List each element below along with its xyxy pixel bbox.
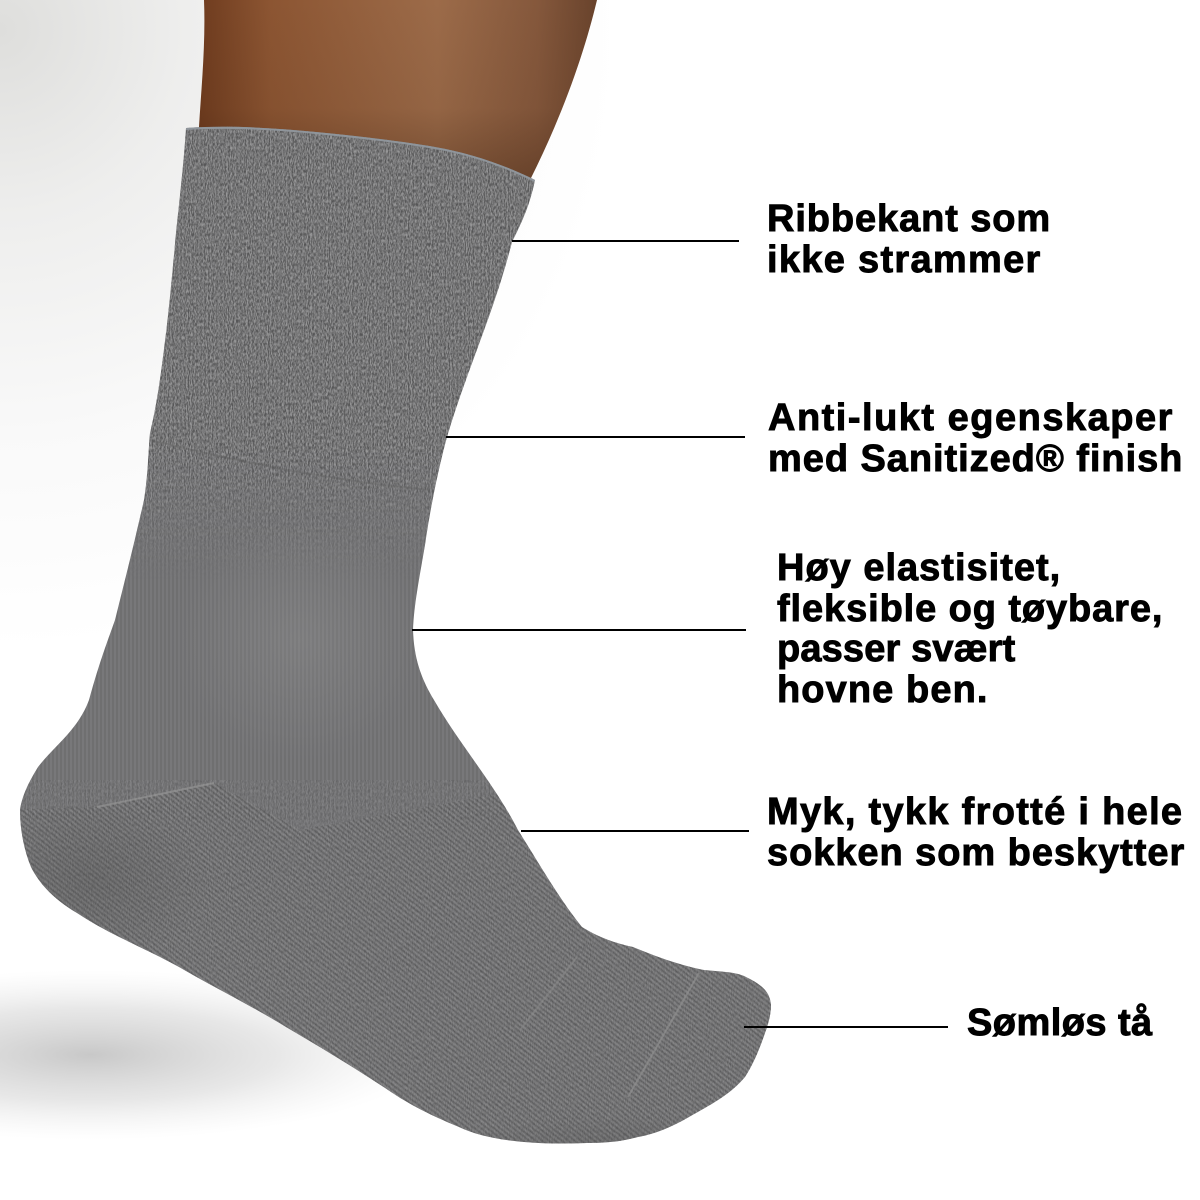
- label: anti-odour: [768, 397, 1183, 480]
- label: terry: Myk, tykk frotté i hele: [767, 791, 1183, 833]
- label: seamless toe: Sømløs tå: [967, 1002, 1153, 1044]
- sock: [20, 126, 771, 1144]
- label: elasticity: Høy elastisitet,: [777, 547, 1061, 589]
- label: terry: [767, 791, 1185, 874]
- label: elasticity: fleksible og tøybare,: [777, 588, 1163, 630]
- label: elasticity: passer svært: [777, 628, 1015, 670]
- label: terry: sokken som beskytter: [767, 832, 1185, 874]
- label: anti-odour: med Sanitized® finish: [768, 438, 1183, 480]
- label: elasticity: hovne ben.: [777, 668, 989, 710]
- label: ribbed edge: Ribbekant som: [767, 198, 1051, 240]
- label: ribbed edge: ikke strammer: [767, 238, 1042, 280]
- callout lines: [412, 241, 948, 1027]
- label: anti-odour: Anti-lukt egenskaper: [768, 397, 1174, 439]
- leg: [198, 0, 597, 180]
- label: elasticity: [777, 547, 1163, 710]
- product photo: leg and sock with callout lines: [0, 0, 948, 1144]
- label: ribbed edge: [767, 198, 1051, 280]
